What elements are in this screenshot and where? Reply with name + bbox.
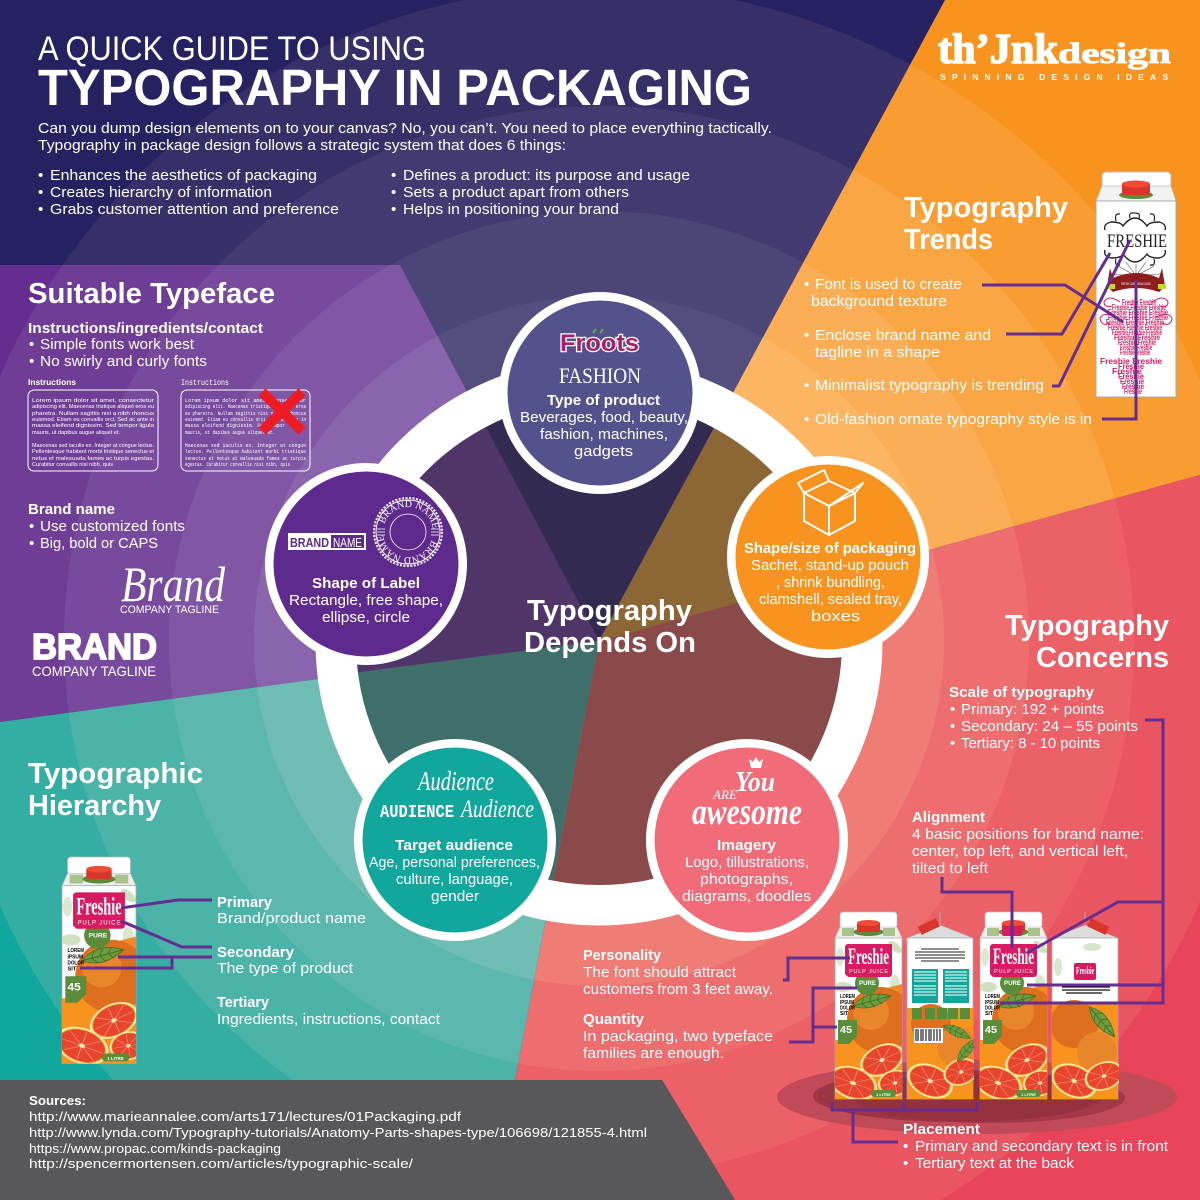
- white ornate carton: Freshie Freshie: [1100, 357, 1163, 366]
- target audience text: Age, personal preferences,: [369, 854, 540, 871]
- scale of typography: Secondary: 24 – 55 points: [961, 718, 1138, 735]
- logo: think design: design: [1058, 37, 1171, 70]
- good font sample box: Instructions: [28, 378, 77, 387]
- white ornate carton: FRESHIE: [1107, 231, 1167, 252]
- curly font sample box with red cross: Lorem ipsum dolor sit amet, consectetur: [185, 397, 306, 404]
- white ornate carton: Freshie Freshie: [1120, 348, 1150, 357]
- list of six typography roles: Sets a product apart from others: [403, 184, 629, 201]
- white ornate carton: Freshie Freshie Freshie: [1112, 303, 1166, 312]
- curly font sample box with red cross: Maecenas sed iaculis ex. Integer at congue: [185, 442, 306, 449]
- Fashion wordmark: FASHION: [559, 363, 641, 388]
- placement text: •: [903, 1138, 908, 1155]
- trends list: background texture: [811, 293, 947, 310]
- list of six typography roles: Helps in positioning your brand: [403, 201, 619, 218]
- shape of label text: Shape of Label: [312, 575, 420, 592]
- scale of typography: •: [950, 735, 955, 752]
- white ornate carton: [1096, 172, 1176, 397]
- imagery text: [682, 837, 811, 905]
- hierarchy carton: LOREM: [68, 948, 84, 954]
- carton 1 front: DOLOR: [840, 1006, 855, 1012]
- white ornate carton: Freshie Freshie: [1120, 343, 1152, 352]
- trends list: Enclose brand name and: [815, 327, 991, 344]
- carton 3 front with top label: Freshie: [993, 944, 1034, 969]
- trends list: tagline in a shape: [815, 344, 940, 361]
- audience type samples: Audience: [459, 796, 534, 823]
- list of six typography roles: •: [391, 167, 396, 184]
- hierarchy carton: 1 LITRE: [107, 1056, 124, 1061]
- carton 1 front: [824, 912, 914, 1107]
- heading: typography concerns: [1005, 610, 1169, 674]
- panel: sources: Sources:: [29, 1093, 86, 1108]
- imagery text: Imagery: [717, 837, 777, 854]
- trends list: •: [804, 276, 809, 293]
- concerns leader lines: [783, 720, 1163, 1142]
- trends list: Old-fashion ornate typography style is in: [815, 411, 1092, 428]
- trends list: Font is used to create: [815, 276, 962, 293]
- circle: type of product: [499, 292, 701, 494]
- shape of label text: ellipse, circle: [322, 609, 410, 626]
- trends list: Minimalist typography is trending: [815, 377, 1044, 394]
- circle: target audience: [354, 739, 556, 941]
- heading: typographic hierarchy: Hierarchy: [28, 790, 161, 822]
- good font sample box: Lorem ipsum dolor sit amet, consectetur: [32, 398, 154, 404]
- list of six typography roles: Creates hierarchy of information: [50, 184, 272, 201]
- intro text: [38, 120, 772, 154]
- carton 3 front with top label: LOREM: [985, 994, 1000, 1000]
- icon: open box: [798, 470, 863, 535]
- white ornate carton: Freshie: [1120, 377, 1144, 386]
- list of six typography roles: •: [391, 201, 396, 218]
- quantity: In packaging, two typeface: [583, 1028, 773, 1045]
- audience type samples: Audience: [416, 766, 494, 796]
- custom brand sample: COMPANY TAGLINE: [120, 604, 219, 616]
- carton 1 front: Freshie: [848, 944, 889, 969]
- white ornate carton: Freshie: [1112, 367, 1143, 376]
- quantity: [583, 1011, 773, 1062]
- hierarchy labels: Secondary: [217, 944, 295, 961]
- brand name guidance: Big, bold or CAPS: [40, 535, 158, 552]
- alignment: [912, 809, 1144, 877]
- placement text: Placement: [903, 1121, 980, 1138]
- hand-lettered "You are awesome": ARE: [712, 787, 737, 802]
- scale of typography: •: [950, 701, 955, 718]
- hierarchy carton: PURE: [88, 933, 108, 940]
- placement text: •: [903, 1155, 908, 1172]
- shape and size text: , shrink bundling,: [776, 574, 885, 591]
- hierarchy carton: DOLOR: [68, 961, 84, 967]
- shape and size text: Sachet, stand-up pouch: [751, 557, 909, 574]
- good font sample box: Pellentesque habitant morbi tristique senectus et: [32, 449, 154, 455]
- heading: typography trends: [904, 192, 1068, 256]
- white ornate carton: Freshie: [1118, 372, 1144, 381]
- carton 3 front with top label: 1 LITRE: [1021, 1092, 1036, 1097]
- heading: typography trends: Trends: [904, 224, 993, 256]
- brand name guidance: •: [29, 535, 34, 552]
- brand name rectangle label: [288, 533, 366, 550]
- curly font sample box with red cross: lectus. Pellentesque habitant morbi tristique: [185, 448, 306, 455]
- intro text: Typography in package design follows a strategic system that does 6 things:: [38, 137, 566, 154]
- hierarchy carton: IPSUM: [68, 955, 83, 961]
- trends list: [804, 276, 1092, 428]
- carton 3 front with top label: 45: [985, 1025, 997, 1036]
- hierarchy carton: [50, 857, 149, 1072]
- placement text: [903, 1121, 1169, 1172]
- panel: sources: http://www.lynda.com/Typography-tutorials/Anatomy-Parts-shapes-type/106698/121855-4.html: [29, 1125, 647, 1140]
- carton 4 side: Freshie: [1076, 966, 1094, 977]
- hand-lettered "You are awesome": [692, 757, 802, 833]
- carton 3 front with top label: SIT: [985, 1011, 993, 1017]
- brand name guidance: Brand name: [28, 501, 115, 518]
- list of six typography roles: [38, 167, 690, 218]
- heading: typography concerns: Concerns: [1036, 642, 1169, 674]
- panel: sources: http://spencermortensen.com/articles/typographic-scale/: [29, 1156, 413, 1171]
- circle: imagery: [646, 739, 848, 941]
- custom brand sample: Brand: [121, 556, 226, 612]
- panel: typographic hierarchy: [28, 758, 441, 1072]
- shape and size text: Shape/size of packaging: [744, 540, 916, 557]
- brand name guidance: [28, 501, 185, 552]
- imagery text: diagrams, doodles: [682, 888, 811, 905]
- brand name round stamp: [373, 497, 443, 567]
- panel: typography trends: [804, 172, 1176, 428]
- hand-lettered "You are awesome": You: [735, 767, 775, 798]
- alignment: tilted to left: [912, 860, 989, 877]
- good font sample box: pharetra. Nullam sagittis nisi a nibh rhoncus: [32, 411, 154, 417]
- central ring and wedges: [316, 376, 882, 926]
- carton 3 front with top label: PULP JUICE: [994, 969, 1033, 975]
- good font sample box: massa eleifend dignissim. Sed tempor ligula: [32, 423, 155, 429]
- white ornate carton: Freshie Freshie: [1122, 298, 1156, 307]
- good font sample box: Maecenas sed iaculis ex. Integer at congue lectus.: [32, 443, 154, 449]
- type of product text: Type of product: [547, 392, 660, 409]
- imagery text: photographs,: [700, 871, 793, 888]
- trends list: •: [804, 377, 809, 394]
- hand-lettered "You are awesome": awesome: [692, 792, 802, 833]
- instructions guidance: [28, 320, 263, 370]
- target audience text: culture, language,: [396, 871, 513, 888]
- white ornate carton: Freshie Freshie Freshie: [1106, 318, 1164, 327]
- curly font sample box with red cross: eu pharetra. Nullam sagittis nisi a nibh rhoncus: [185, 410, 306, 417]
- background: purple wedge: [0, 265, 599, 722]
- white ornate carton: Freshie: [1124, 387, 1142, 396]
- type of product text: [520, 392, 688, 460]
- hierarchy carton: Freshie: [76, 892, 122, 920]
- carton 1 front: IPSUM: [840, 1000, 854, 1006]
- hierarchy carton: SIT: [68, 967, 77, 973]
- hierarchy labels: Ingredients, instructions, contact: [217, 1011, 441, 1028]
- target audience text: Target audience: [395, 837, 513, 854]
- trends list: •: [804, 327, 809, 344]
- shape and size text: boxes: [811, 608, 860, 625]
- carton 3 front with top label: DOLOR: [985, 1006, 1000, 1012]
- hierarchy carton: 45: [68, 982, 81, 994]
- curly font sample box with red cross: adipiscing elit. Maecenas tristique aliquet eros: [185, 403, 306, 410]
- carton 1 front: 45: [840, 1025, 852, 1036]
- carton 3 front with top label: IPSUM: [985, 1000, 999, 1006]
- curly font sample box with red cross: [181, 379, 310, 471]
- good font sample box: netus et malesuada fames ac turpis egestas.: [32, 456, 154, 462]
- white ornate carton: Freshie Freshie Freshie: [1108, 308, 1168, 317]
- alignment: 4 basic positions for brand name:: [912, 826, 1144, 843]
- target audience text: gender: [431, 888, 479, 905]
- hierarchy labels: Primary: [217, 894, 273, 911]
- curly font sample box with red cross: egestas. Curabitur convallis nisi nibh, quis: [185, 461, 290, 468]
- instructions guidance: Instructions/ingredients/contact: [28, 320, 263, 337]
- circle: shape of label: [265, 463, 467, 665]
- list of six typography roles: •: [38, 184, 43, 201]
- background: orange wedge: [599, 0, 1200, 641]
- brand name guidance: •: [29, 518, 34, 535]
- panel: suitable typeface: [28, 278, 310, 679]
- panel: sources: https://www.propac.com/kinds-packaging: [29, 1141, 281, 1156]
- type of product text: fashion, machines,: [540, 426, 668, 443]
- list of six typography roles: Enhances the aesthetics of packaging: [50, 167, 317, 184]
- personality: Personality: [583, 947, 662, 964]
- brand name guidance: Use customized fonts: [40, 518, 185, 535]
- scale of typography: [949, 684, 1138, 752]
- bold brand sample: COMPANY TAGLINE: [32, 663, 156, 679]
- white ornate carton: Freshie: [1118, 362, 1144, 371]
- white ornate carton: Freshie Freshie Freshie: [1112, 328, 1162, 337]
- panel: typography concerns: [583, 610, 1177, 1172]
- carton 3 front with top label: PURE: [1004, 981, 1021, 987]
- scale of typography: Scale of typography: [949, 684, 1095, 701]
- carton 3 front with top label: [969, 912, 1059, 1107]
- title: A QUICK GUIDE TO USING: [38, 30, 426, 68]
- quantity: families are enough.: [583, 1045, 724, 1062]
- instructions guidance: No swirly and curly fonts: [40, 353, 207, 370]
- hierarchy labels: The type of product: [217, 960, 354, 977]
- white ornate carton: Freshie Freshie Freshie: [1108, 323, 1162, 332]
- hierarchy labels: Brand/product name: [217, 910, 366, 927]
- brand name round stamp: BRAND NAME: [378, 500, 439, 528]
- good font sample box: [28, 378, 158, 471]
- white ornate carton: Freshie Freshie Freshie: [1108, 313, 1168, 322]
- logo: think design: [938, 27, 1171, 82]
- instructions guidance: •: [29, 336, 34, 353]
- carton 1 front: 1 LITRE: [876, 1092, 891, 1097]
- hierarchy labels: Tertiary: [217, 994, 270, 1011]
- centre heading: Typography: [527, 595, 692, 627]
- good font sample box: adipiscing elit. Maecenas tristique aliquet eros eu: [32, 404, 154, 410]
- good font sample box: euismod. Etiam eu convallis orci. Sed ac ante in: [32, 417, 154, 423]
- list of six typography roles: •: [38, 167, 43, 184]
- list of six typography roles: •: [391, 184, 396, 201]
- audience type samples: AUDIENCE: [380, 803, 454, 823]
- personality: customers from 3 feet away.: [583, 981, 773, 998]
- shape of label text: [289, 575, 443, 626]
- heading: suitable typeface: Suitable Typeface: [28, 278, 275, 310]
- imagery text: Logo, tillustrations,: [685, 854, 809, 871]
- trends list: •: [804, 411, 809, 428]
- instructions guidance: Simple fonts work best: [40, 336, 195, 353]
- placement text: Primary and secondary text is in front: [915, 1138, 1169, 1155]
- good font sample box: Curabitur convallis nisi nibh, quis: [32, 462, 113, 468]
- list of six typography roles: Grabs customer attention and preference: [50, 201, 339, 218]
- Froots logo: Froots: [560, 330, 639, 357]
- white ornate carton: Freshie Freshie: [1118, 338, 1156, 347]
- shadow under cartons: [777, 1060, 1177, 1134]
- carton 1 front: PULP JUICE: [849, 969, 888, 975]
- shape and size text: [744, 540, 916, 625]
- bold brand sample: BRAND: [32, 626, 157, 667]
- background: red wedge: [515, 475, 1200, 1200]
- curly font sample box with red cross: mauris, ut dapibus augue aliquet et.: [185, 429, 275, 436]
- curly font sample box with red cross: Instructions: [181, 379, 229, 388]
- centre heading: [524, 595, 696, 659]
- hierarchy leader lines: [80, 900, 212, 968]
- heading: typographic hierarchy: [28, 758, 203, 822]
- carton 2 back: [906, 912, 974, 1100]
- carton 4 side: [1052, 912, 1119, 1100]
- heading: typographic hierarchy: Typographic: [28, 758, 203, 790]
- brand name rectangle label: BRAND: [290, 535, 329, 550]
- title: [38, 30, 752, 116]
- heading: typography concerns: Typography: [1005, 610, 1169, 642]
- shape of label text: Rectangle, free shape,: [289, 592, 443, 609]
- brand name rectangle label: NAME: [333, 535, 362, 550]
- curly font sample box with red cross: senectus et netus et malesuada fames ac turpis: [185, 455, 306, 462]
- white ornate carton: Freshie: [1122, 382, 1144, 391]
- panel: sources: [0, 1080, 735, 1200]
- white ornate carton: Freshie Freshie: [1114, 333, 1160, 342]
- personality: [583, 947, 773, 998]
- heading: typography trends: Typography: [904, 192, 1068, 224]
- hierarchy carton: PULP JUICE: [77, 920, 121, 926]
- shape and size text: clamshell, sealed tray,: [759, 591, 902, 608]
- scale of typography: Tertiary: 8 - 10 points: [961, 735, 1100, 752]
- background: teal wedge: [0, 641, 599, 1080]
- list of six typography roles: Defines a product: its purpose and usage: [403, 167, 690, 184]
- list of six typography roles: •: [38, 201, 43, 218]
- alignment: center, top left, and vertical left,: [912, 843, 1128, 860]
- placement text: Tertiary text at the back: [915, 1155, 1075, 1172]
- instructions guidance: •: [29, 353, 34, 370]
- circle: shape and size of packaging: [727, 456, 929, 658]
- white ornate carton: FRESH CARRIBEAN JUICE: [1121, 281, 1151, 286]
- title: TYPOGRAPHY IN PACKAGING: [38, 59, 752, 116]
- curly font sample box with red cross: euismod. Etiam eu convallis orci. Sed ac ante in: [185, 416, 306, 423]
- trends leader lines: [982, 240, 1136, 419]
- type of product text: Beverages, food, beauty,: [520, 409, 688, 426]
- hierarchy labels: [217, 894, 441, 1028]
- intro text: Can you dump design elements on to your canvas? No, you can’t. You need to place everything tactically.: [38, 120, 772, 137]
- curly font sample box with red cross: massa eleifend dignissim. Sed tempor: [185, 422, 285, 429]
- carton 1 front: PURE: [859, 981, 876, 987]
- target audience text: [369, 837, 540, 905]
- centre heading: Depends On: [524, 627, 696, 659]
- logo: think design: SPINNING DESIGN IDEAS: [940, 72, 1168, 82]
- personality: The font should attract: [583, 964, 737, 981]
- good font sample box: mauris, ut dapibus augue aliquet et.: [32, 430, 120, 436]
- alignment: Alignment: [912, 809, 985, 826]
- logo: think design: th’Jnk: [938, 27, 1059, 73]
- brand name round stamp: BRAND NAME: [377, 536, 438, 564]
- carton 1 front: LOREM: [840, 994, 855, 1000]
- scale of typography: •: [950, 718, 955, 735]
- carton 1 front: SIT: [840, 1011, 848, 1017]
- panel: sources: http://www.marieannalee.com/arts171/lectures/01Packaging.pdf: [29, 1109, 461, 1124]
- audience type samples: [380, 766, 534, 823]
- background: navy header wedge: [0, 0, 945, 641]
- quantity: Quantity: [583, 1011, 645, 1028]
- type of product text: gadgets: [574, 443, 633, 460]
- scale of typography: Primary: 192 + points: [961, 701, 1104, 718]
